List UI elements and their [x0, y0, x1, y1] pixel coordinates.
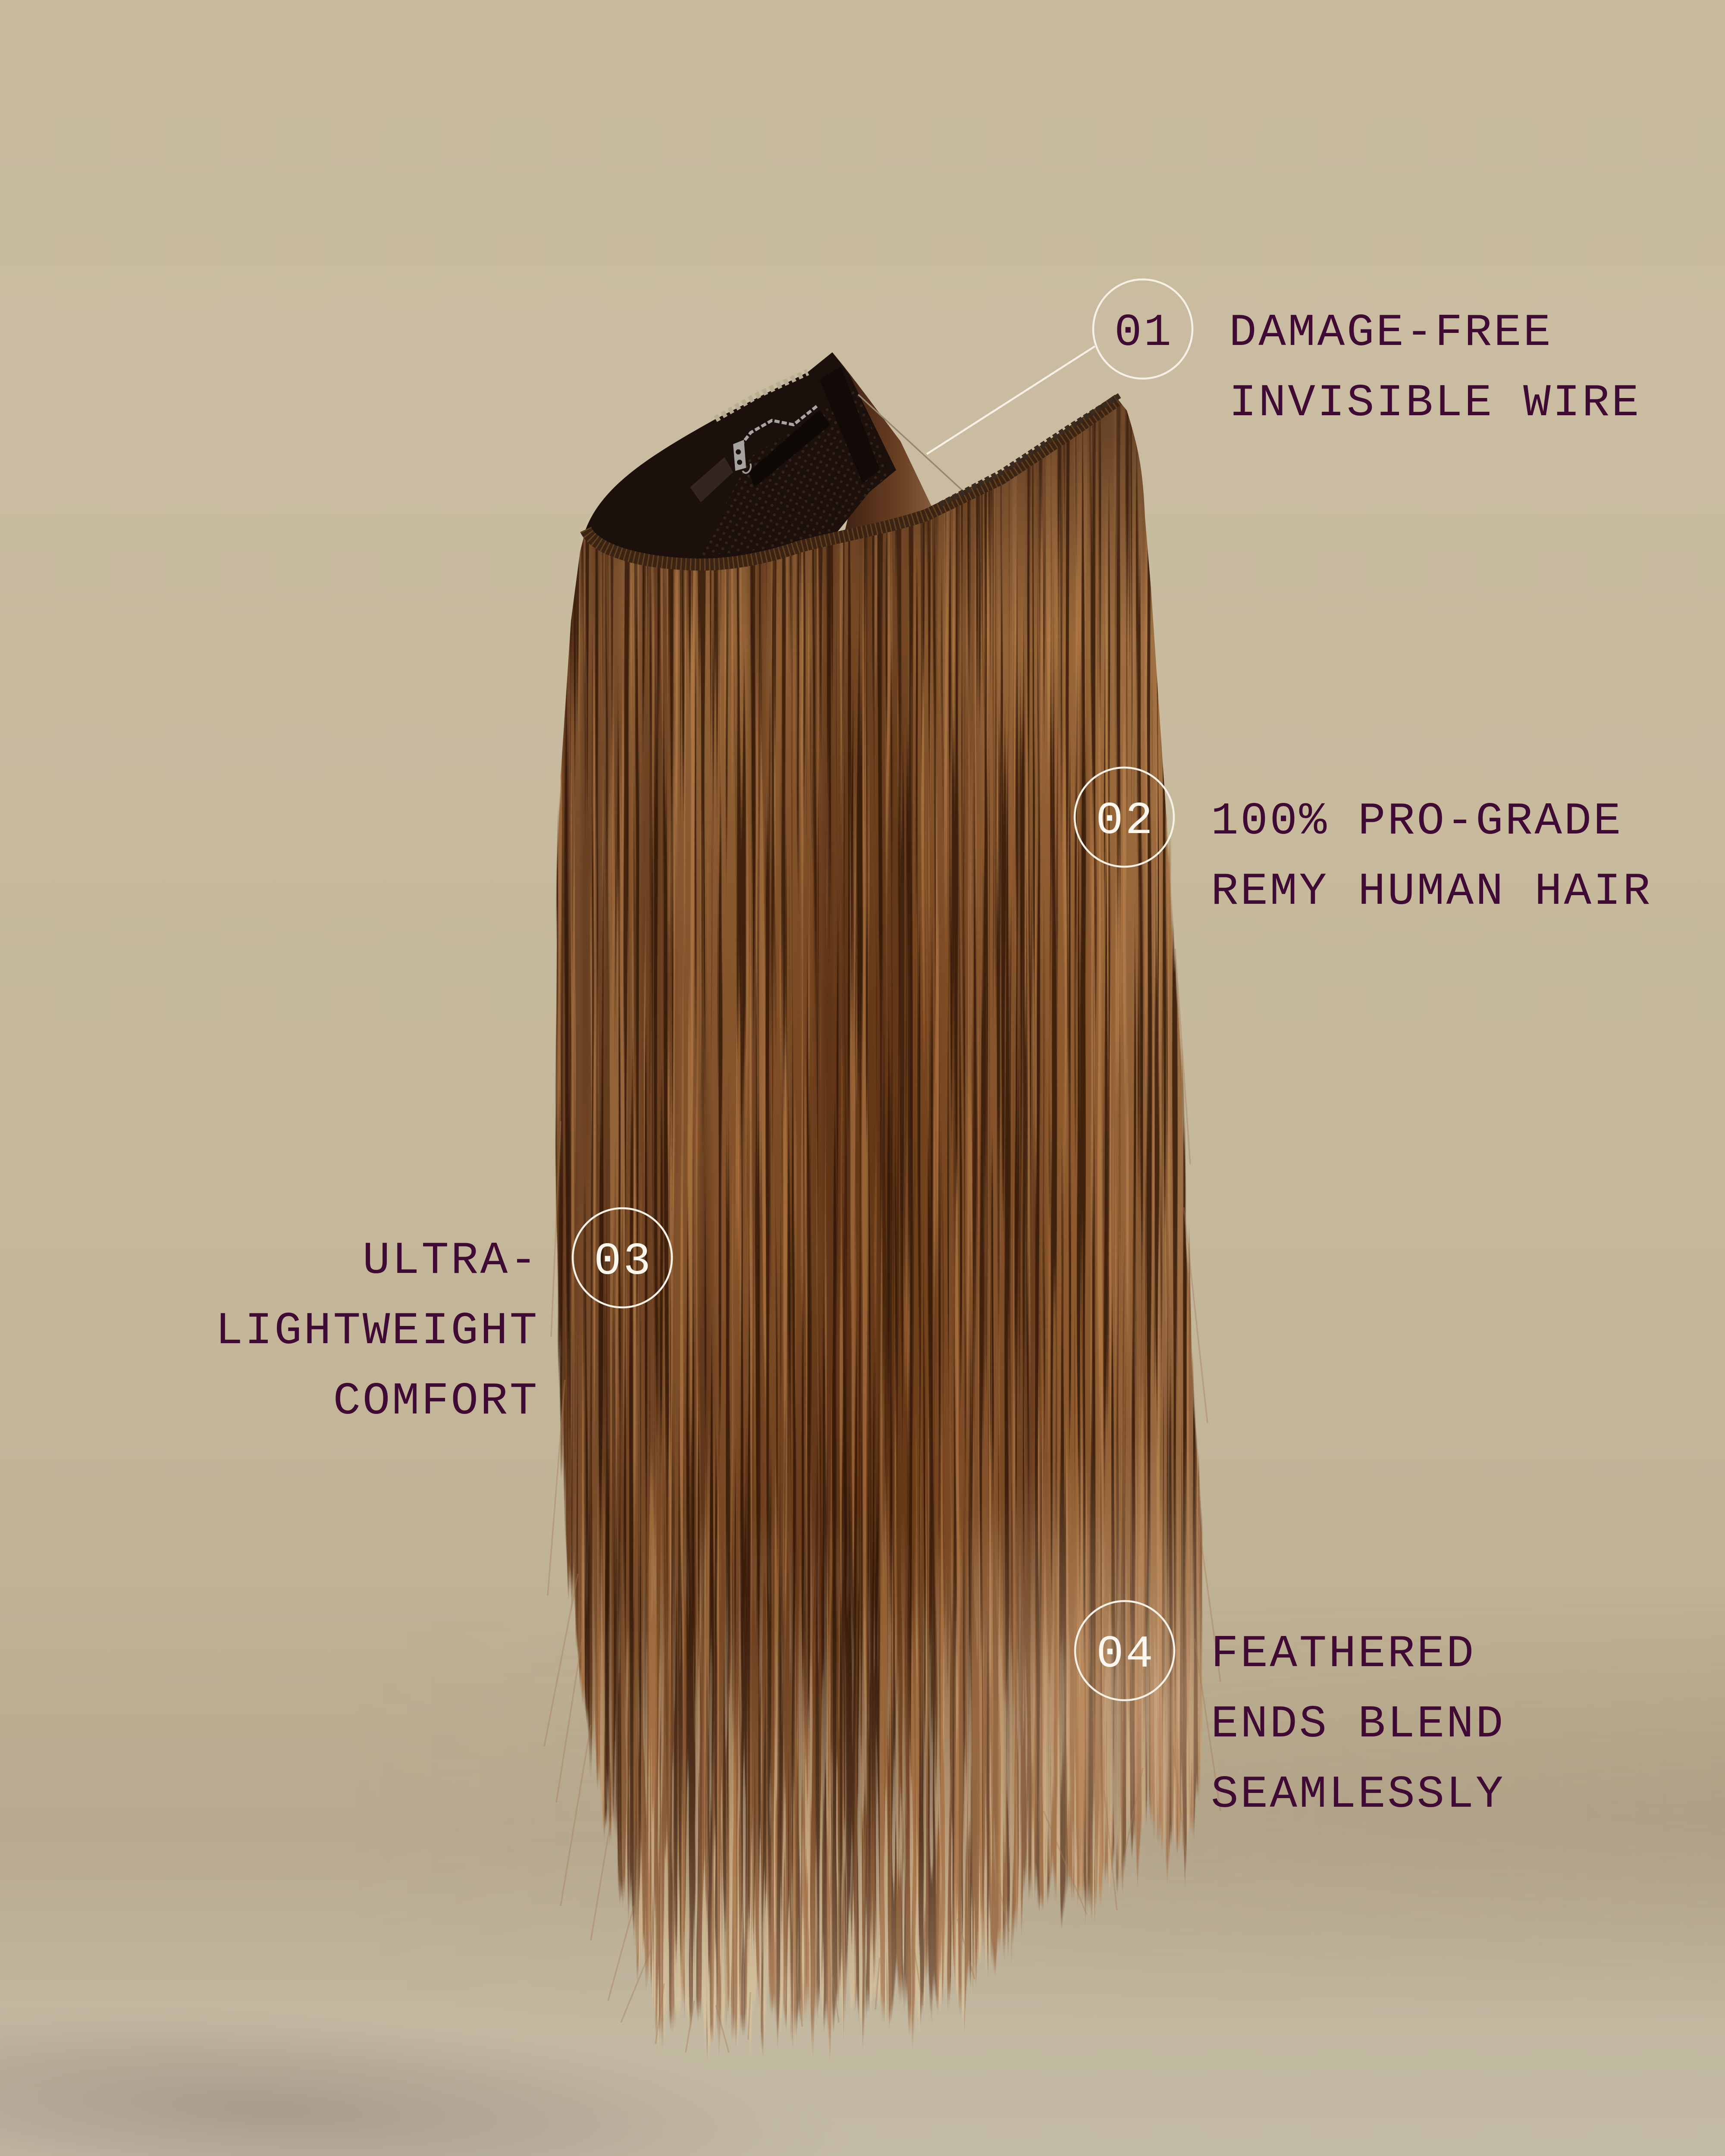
- callout 01: damage-free invisible wire: [927, 279, 1641, 454]
- back hair panel: [832, 352, 933, 548]
- callout 03: ultra-lightweight comfort: [216, 1208, 672, 1427]
- callout 04: feathered ends: [1075, 1601, 1505, 1821]
- number badge 02: 02: [1096, 795, 1154, 847]
- label 02: 100% PRO-GRADE: [1211, 796, 1623, 847]
- number badge 04: 04: [1096, 1629, 1155, 1680]
- hair extension product: [543, 352, 1221, 2059]
- label 04: ENDS BLEND: [1211, 1698, 1505, 1750]
- stray hair wisps: [544, 949, 1220, 2053]
- label 04: FEATHERED: [1211, 1628, 1476, 1680]
- inner cap: [586, 352, 896, 566]
- invisible wire: [858, 395, 966, 494]
- hair weft seam: [586, 395, 1121, 564]
- number badge 01: [1093, 279, 1192, 379]
- number badge 02: [1075, 768, 1174, 867]
- darker horizon band on the right: [1292, 1747, 1725, 1883]
- label 03: ULTRA-: [363, 1235, 539, 1287]
- number badge 03: 03: [594, 1236, 652, 1288]
- number badge 03: [573, 1208, 672, 1307]
- label 02: REMY HUMAN HAIR: [1211, 866, 1652, 918]
- number badge 01: 01: [1114, 307, 1173, 359]
- callout 02: remy human hair: [1075, 768, 1652, 918]
- connector line: [927, 346, 1095, 454]
- label 03: COMFORT: [333, 1376, 539, 1427]
- straight hair strands: [474, 367, 1272, 2091]
- number badge 04: [1075, 1601, 1174, 1700]
- label 01: DAMAGE-FREE: [1229, 307, 1552, 359]
- label 01: INVISIBLE WIRE: [1229, 377, 1641, 429]
- label 04: SEAMLESSLY: [1211, 1769, 1505, 1821]
- label 03: LIGHTWEIGHT: [216, 1305, 539, 1357]
- floor shadow: [0, 1979, 854, 2156]
